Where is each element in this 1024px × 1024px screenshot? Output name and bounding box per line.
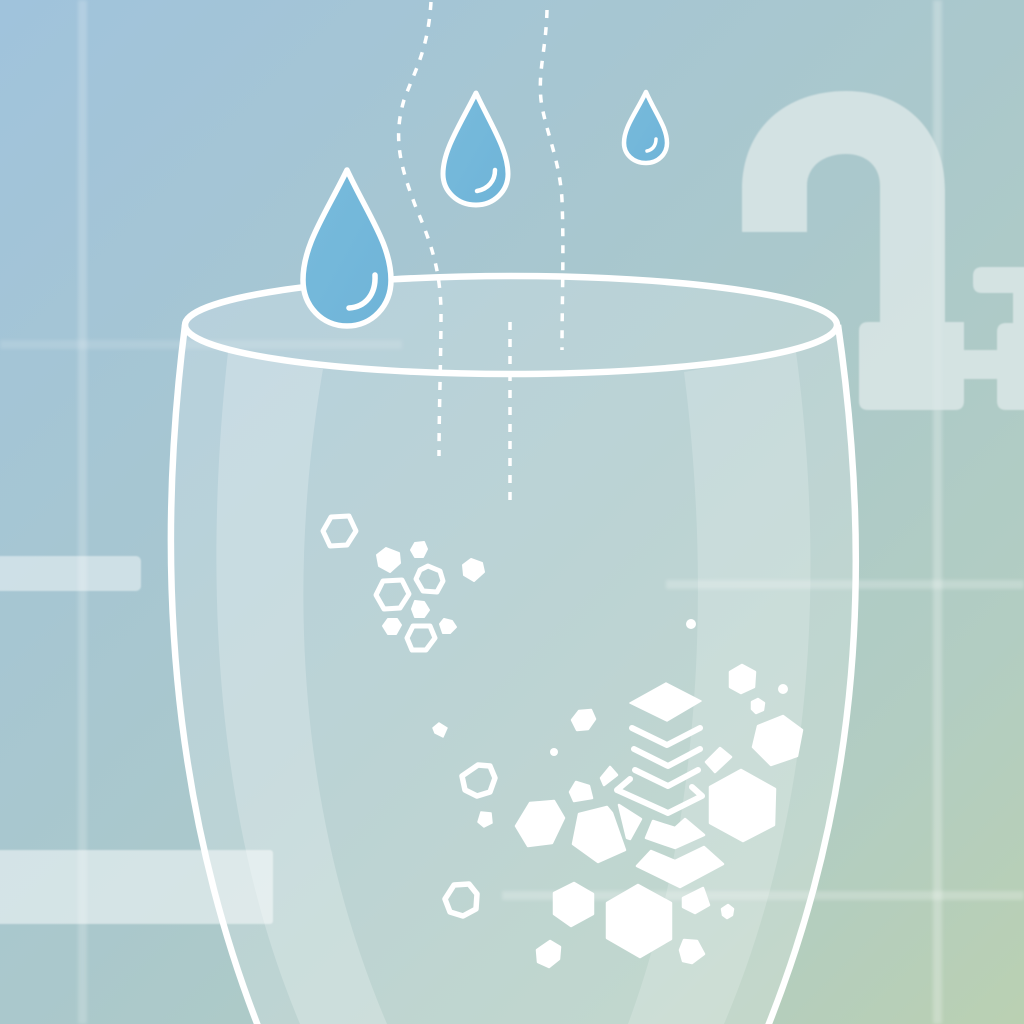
glass right highlight — [628, 352, 810, 1024]
glass outline — [171, 325, 856, 1024]
icon: small water drop — [624, 92, 667, 163]
background shelf: upper left — [0, 556, 141, 591]
lower loose particles — [433, 619, 788, 916]
background faucet — [742, 91, 1024, 410]
crystal mineral cluster — [516, 665, 802, 967]
glass left highlight — [216, 352, 387, 1024]
dashed water streams — [399, 2, 563, 505]
small mineral particles cluster — [323, 516, 484, 650]
stacked layers icon — [617, 683, 702, 813]
icon: medium water drop — [443, 93, 508, 205]
glass rim — [185, 276, 837, 374]
glass body fill — [171, 276, 856, 1024]
glass — [171, 276, 856, 1024]
background shelf: lower left — [0, 850, 273, 924]
icon: large water drop — [303, 170, 391, 326]
